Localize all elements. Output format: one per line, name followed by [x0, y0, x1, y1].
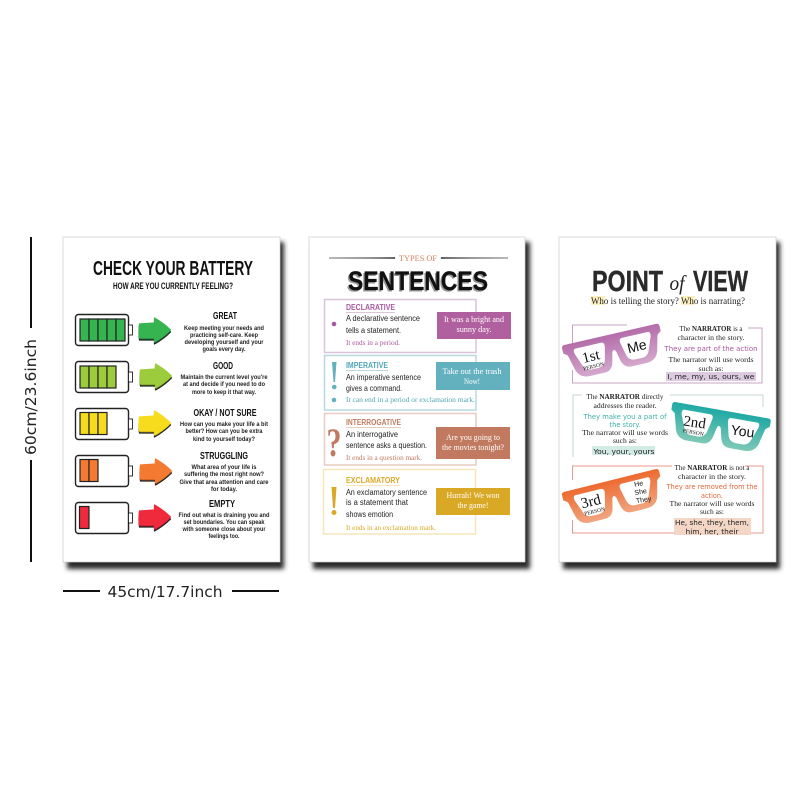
- panel: 1st person: They are part of the action: [664, 345, 758, 353]
- glasses: 1st person: PERSON: [583, 362, 605, 372]
- panel: 1st person: The NARRATOR is a: [680, 324, 743, 333]
- panel: interrogative: Are you going to: [446, 433, 500, 442]
- battery row: empty: EMPTY: [209, 499, 235, 510]
- panel: exclamatory: shows emotion: [346, 510, 393, 519]
- panel: interrogative: ?: [326, 420, 342, 465]
- glasses: 1st person: [561, 323, 667, 381]
- glasses: 3rd person: She: [634, 488, 648, 497]
- panel: declarative: sunny day.: [456, 325, 492, 334]
- battery row: struggling: Give that area attention and care: [180, 480, 269, 486]
- panel: 3rd person: him, her, their: [686, 528, 739, 536]
- dimension: width: 45cm/17.7inch: [108, 583, 222, 601]
- battery row: empty: Find out what is draining you and: [178, 513, 270, 519]
- panel: imperative: gives a command.: [346, 384, 402, 393]
- panel: 1st person: [561, 323, 762, 383]
- panel: 3rd person: They are removed from the: [666, 483, 758, 491]
- title: point of view: POINT: [592, 266, 663, 298]
- panel: 3rd person: such as:: [700, 507, 724, 516]
- title: sentences: SENTENCES: [348, 266, 488, 296]
- glasses: 3rd person: 3rd: [579, 492, 603, 512]
- battery row: okay: kind to yourself today?: [193, 437, 255, 443]
- battery row: good: GOOD: [213, 361, 233, 372]
- battery row: okay: How can you make your life a bit: [180, 422, 268, 428]
- panel: interrogative: [324, 414, 510, 465]
- panel: declarative: tells a statement.: [346, 326, 401, 335]
- panel: 3rd person: The NARRATOR is not a: [674, 463, 750, 472]
- title: sentences: SENTENCES: [346, 268, 486, 298]
- panel: exclamatory: is a statement that: [346, 498, 409, 507]
- battery row: empty: [76, 499, 270, 540]
- panel: declarative: It was a bright and: [444, 315, 504, 324]
- battery row: good: more to keep it that way.: [192, 390, 256, 396]
- panel: exclamatory: the game!: [458, 501, 488, 510]
- glasses: 2nd person: [666, 402, 771, 454]
- panel: 1st person: I, me, my, us, ours, we: [668, 373, 754, 381]
- panel: imperative: IMPERATIVE: [346, 361, 389, 370]
- battery row: great: [76, 311, 264, 353]
- title: point of view: of: [670, 271, 687, 295]
- glasses: 1st person: 1st: [581, 347, 602, 367]
- title: point of view: [592, 266, 748, 298]
- battery row: empty: feelings too.: [208, 534, 240, 540]
- battery row: empty: with someone close about your: [182, 527, 266, 533]
- title: point of view: VIEW: [693, 266, 748, 298]
- panel: exclamatory: [324, 470, 510, 534]
- battery row: okay: [76, 408, 268, 443]
- panel: declarative: [324, 300, 511, 352]
- panel: 2nd person: You, your, yours: [592, 448, 655, 456]
- panel: interrogative: sentence asks a question.: [346, 441, 427, 450]
- battery row: great: goals every day.: [202, 347, 246, 353]
- battery row: good: Maintain the current level you're: [180, 375, 268, 381]
- battery row: okay: OKAY / NOT SURE: [194, 408, 257, 419]
- panel: declarative: It ends in a period.: [346, 339, 400, 347]
- panel: imperative: It can end in a period or exclamation mark.: [346, 396, 475, 404]
- battery row: struggling: for today.: [211, 487, 237, 493]
- battery row: great: developing yourself and your: [184, 340, 264, 346]
- glasses: 2nd person: PERSON: [682, 428, 704, 438]
- battery row: great: GREAT: [213, 311, 237, 322]
- battery row: struggling: suffering the most right now?: [184, 472, 264, 478]
- poster: types of sentences: [309, 237, 530, 569]
- panel: 2nd person: addresses the reader.: [594, 401, 657, 410]
- poster: point of view: [559, 237, 780, 569]
- battery row: empty: set boundaries. You can speak: [184, 520, 265, 526]
- panel: 3rd person: action.: [701, 492, 723, 500]
- panel: 2nd person: They make you a part of: [583, 413, 667, 421]
- panel: interrogative: INTERROGATIVE: [346, 418, 402, 427]
- glasses: 2nd person: You: [730, 421, 756, 441]
- panel: 1st person: character in the story.: [678, 333, 745, 342]
- panel: 2nd person: [573, 392, 771, 457]
- battery row: struggling: [76, 451, 269, 493]
- panel: imperative: Now!: [464, 377, 480, 386]
- panel: declarative: A declarative sentence: [346, 314, 421, 323]
- battery row: good: [76, 361, 268, 396]
- battery row: great: Keep meeting your needs and: [184, 326, 264, 332]
- panel: exclamatory: Hurrah! We won: [446, 491, 500, 500]
- subtitle: HOW ARE YOU CURRENTLY FEELING?: [113, 281, 233, 291]
- panel: exclamatory: An exclamatory sentence: [346, 488, 427, 497]
- panel: 1st person: such as:: [698, 364, 724, 373]
- panel: exclamatory: EXCLAMATORY: [346, 476, 401, 485]
- battery row: struggling: What area of your life is: [192, 465, 257, 471]
- battery row: good: at and decide if you need to do: [183, 382, 265, 388]
- subtitle: Who is telling the story? Who is narrating?: [591, 296, 745, 306]
- dimension: height: 60cm/23.6inch: [22, 339, 40, 455]
- panel: interrogative: It ends in a question mark.: [346, 454, 422, 462]
- battery row: great: practicing self-care. Keep: [190, 333, 258, 339]
- panel: imperative: [324, 356, 510, 410]
- panel: 1st person: The narrator will use words: [668, 355, 754, 364]
- panel: 3rd person: The narrator will use words: [670, 499, 755, 508]
- panel: 2nd person: the story.: [610, 421, 640, 429]
- battery row: struggling: STRUGGLING: [200, 451, 248, 462]
- heading: types of: TYPES OF: [399, 254, 438, 263]
- glasses: 3rd person: He: [634, 480, 644, 489]
- panel: exclamatory: It ends in an exclamation mark.: [346, 524, 436, 532]
- panel: 2nd person: The narrator will use words: [582, 428, 668, 437]
- panel: interrogative: the movies tonight?: [442, 443, 504, 452]
- panel: imperative: Take out the trash: [442, 367, 502, 376]
- panel: interrogative: An interrogative: [346, 430, 399, 439]
- panel: 3rd person: [561, 463, 763, 536]
- battery row: okay: better? How can you be extra: [186, 429, 263, 435]
- glasses: 1st person: Me: [625, 336, 648, 356]
- panel: 3rd person: character in the story.: [678, 472, 746, 481]
- panel: 2nd person: The NARRATOR directly: [586, 392, 664, 401]
- panel: 3rd person: He, she, they, them,: [675, 519, 749, 527]
- title: CHECK YOUR BATTERY: [93, 258, 253, 280]
- glasses: 3rd person: [561, 468, 667, 528]
- panel: declarative: DECLARATIVE: [346, 303, 396, 312]
- panel: imperative: An imperative sentence: [346, 373, 421, 382]
- glasses: 3rd person: PERSON: [584, 507, 606, 517]
- glasses: 3rd person: They: [635, 496, 653, 505]
- glasses: 2nd person: 2nd: [682, 414, 707, 433]
- panel: 2nd person: such as:: [613, 436, 637, 445]
- poster: check your battery: [63, 237, 284, 569]
